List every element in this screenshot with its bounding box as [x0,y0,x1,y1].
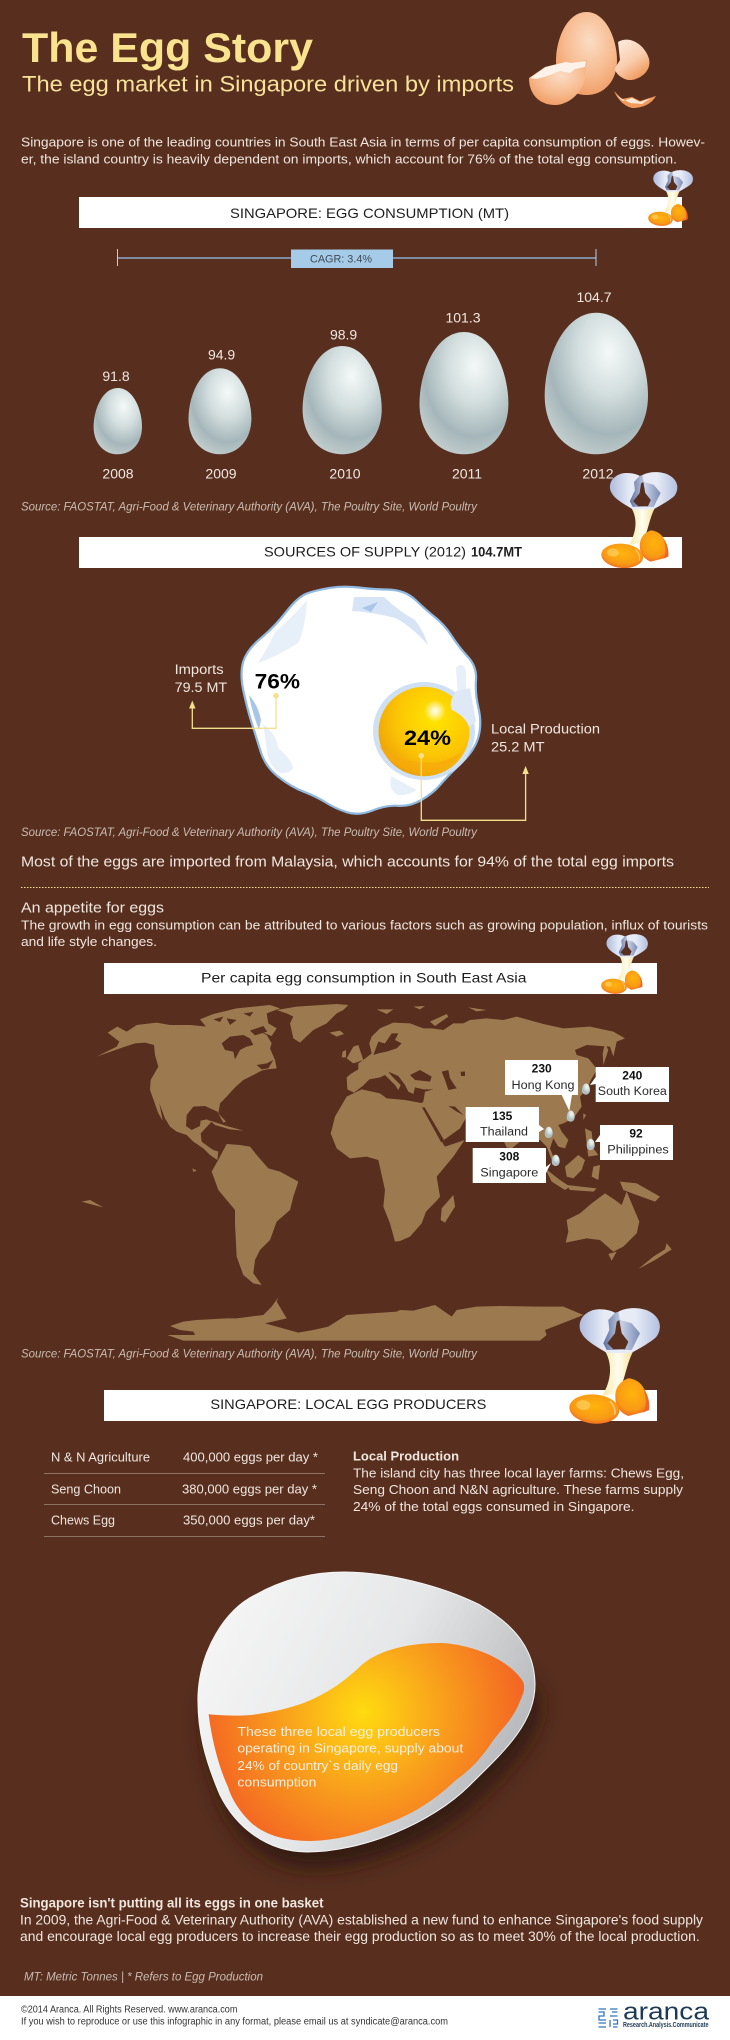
egg 2011: 101.3 [445,310,481,326]
map callout: Singapore [473,1148,560,1183]
New Guinea [620,1182,660,1202]
intro text: er, the island country is heavily dependent on imports, which account for 76% of the total egg consumption. [21,152,677,166]
text block: eggs in one basket [20,1896,703,1944]
table: local egg producers [44,1451,325,1536]
source note 1: Source: FAOSTAT, Agri-Food & Veterinary Authority (AVA), The Poultry Site, World Poultry [21,502,478,514]
chart: egg consumption by year [94,289,648,481]
Iceland [329,1031,344,1037]
egg 2009: 2009 [205,465,237,481]
egg 2008: 2008 [102,465,134,481]
Svalbard and Novaya Zemlya [377,1006,487,1026]
text block: local production: Seng Choon and N&N agriculture. These farms supply [353,1482,684,1497]
heading bar: egg consumption: SINGAPORE: EGG CONSUMPTION (MT) [230,205,509,221]
fried egg chart [242,587,480,814]
egg 2010: 2010 [329,465,361,481]
egg 2008 [94,368,142,481]
label: 76%: 76% [255,671,300,694]
Gulf of Aden [443,1137,467,1147]
map callout: Philippines [587,1125,673,1160]
text block: local production [353,1449,684,1514]
row: Seng Choon: 380,000 eggs per day * [182,1482,317,1496]
egg 2012 [545,289,648,481]
Borneo and Celebes [565,1155,600,1180]
yolk [373,682,475,780]
callout text: operating in Singapore, supply about [237,1741,464,1756]
row: N & N Agriculture [51,1451,318,1465]
row: Chews Egg: 350,000 eggs per day* [183,1514,315,1528]
footnote: MT: Metric Tonnes | * Refers to Egg Production [24,1972,263,1984]
heading bar: per capita consumption [104,963,657,994]
heading bar: sources of supply [79,537,682,568]
row: N & N Agriculture: N & N Agriculture [51,1451,150,1465]
heading bar: sources of supply: SOURCES OF SUPPLY (2012) [264,544,466,560]
Arctic islands [200,1005,280,1036]
Australia [566,1192,639,1252]
New Zealand [638,1243,672,1269]
heading bar: per capita consumption: Per capita egg consumption in South East Asia [201,970,527,986]
copyright text: ©2014 Aranca. All Rights Reserved. www.aranca.com [21,2004,237,2015]
text block: an appetite for eggs: The growth in egg consumption can be attributed to various factors such as growing population, influx of tourists [21,918,708,932]
Eurasia [347,1017,625,1165]
icon: cracked egg small [648,170,693,227]
egg shadow [204,1617,541,1869]
egg 2010: 98.9 [330,326,357,342]
map callout: Philippines: 92 [629,1127,643,1141]
text block: local production: The island city has three local layer farms: Chews Egg, [353,1465,684,1480]
egg white shading [249,597,473,795]
Greenland [277,1004,348,1043]
Caspian and Aral [442,1070,465,1090]
heading bar: egg consumption [79,197,682,228]
Black Sea [410,1070,432,1082]
egg shell [198,1572,535,1852]
Cuba and Hispaniola [210,1121,243,1131]
label: local production: 25.2 MT [491,739,544,754]
egg 2009: 94.9 [208,346,235,362]
statement: Malaysia imports: Most of the eggs are imported from Malaysia, which accounts for 94% of the total egg imports [21,855,674,871]
copyright text: If you wish to reproduce or use this infographic in any format, please email us at syndicate@aranca.com [21,2016,448,2027]
egg 2011 [420,310,508,481]
row: N & N Agriculture: 400,000 eggs per day * [183,1451,318,1465]
heading bar: local egg producers: SINGAPORE: LOCAL EGG PRODUCERS [210,1396,486,1412]
intro text: Singapore is one of the leading countries in South East Asia in terms of per capita consumption of eggs. Howev- [21,136,705,150]
row: Seng Choon: Seng Choon [51,1482,121,1496]
Antarctica [167,1297,583,1341]
text block: local production: Local Production [353,1449,459,1464]
callout text: 24% of country`s daily egg [237,1758,398,1773]
egg 2012: 104.7 [576,289,612,305]
map: Eurasia, Africa, Oceania [331,1006,672,1269]
egg 2009 [188,346,251,481]
map callout: Thailand: 135 [492,1109,513,1123]
CAGR bracket: CAGR: 3.4% [310,254,372,266]
Arctic channels [213,1012,267,1035]
CAGR bracket [117,249,596,268]
Sakhalin [603,1043,608,1065]
Gulf of St Lawrence [257,1060,273,1069]
Tasmania [608,1252,617,1261]
arrow: local production [418,753,529,820]
label: local production: Local Production [491,721,600,736]
map callout: Hong Kong: 230 [532,1062,552,1076]
icon: brown eggs and shells [529,12,656,108]
subtitle: The egg market in Singapore driven by imports [22,72,514,96]
Sumatra and Java [545,1168,597,1192]
row: Seng Choon [51,1482,317,1496]
label: imports: 79.5 MT [175,680,227,695]
heading bar: local egg producers [104,1390,657,1421]
callout text: These three local egg producers [237,1724,441,1739]
egg 2010 [303,326,382,481]
label: imports [175,662,227,695]
egg white [242,587,480,814]
label: 24%: 24% [404,727,451,750]
map callout: Thailand: Thailand [480,1126,528,1138]
map callout: Philippines: Philippines [607,1144,669,1156]
text block: an appetite for eggs: An appetite for eggs [21,901,164,917]
map callout: South Korea: South Korea [598,1086,667,1098]
map callout: South Korea: 240 [622,1068,643,1082]
logo: aranca [598,1998,710,2029]
title: The Egg Story [22,24,314,71]
big egg callout [198,1572,541,1869]
egg 2011: 2011 [452,465,482,481]
text block: eggs in one basket: and encourage local egg producers to increase their egg production so as to meet 30% of the local production. [20,1929,700,1944]
egg 2008: 91.8 [102,368,130,384]
logo: aranca: aranca [623,1998,710,2025]
South America [212,1144,298,1285]
label: imports: Imports [175,662,224,677]
map: Americas, Greenland, Antarctica [82,1004,583,1341]
source note 2: Source: FAOSTAT, Agri-Food & Veterinary Authority (AVA), The Poultry Site, World Poultry [21,827,478,839]
North America [97,1023,277,1160]
intro text [21,136,705,166]
world map [82,1004,672,1341]
copyright text [21,2004,448,2027]
Madagascar [441,1195,455,1223]
map callout: Singapore: Singapore [480,1168,538,1180]
footer [0,1996,730,2040]
Red Sea [422,1107,444,1143]
text block: eggs in one basket: In 2009, the Agri-Food & Veterinary Authority (AVA) established a new fund to enhance Singapore's food supply [20,1912,703,1927]
map callout: Hong Kong [505,1060,578,1122]
Hudson Bay [222,1035,253,1059]
Pacific specks [82,1168,197,1207]
icon: cracked egg medium [600,472,677,570]
row: Chews Egg: Chews Egg [51,1514,115,1528]
source note 3: Source: FAOSTAT, Agri-Food & Veterinary Authority (AVA), The Poultry Site, World Poultry [21,1348,478,1360]
orange yolk panel [209,1643,524,1841]
callout text: consumption [237,1775,316,1790]
Baltic Sea [373,1033,402,1055]
Africa [331,1089,465,1242]
heading bar: sources of supply: 104.7MT [471,544,522,560]
Britain and Ireland [342,1045,363,1063]
label: local production [491,721,600,754]
callout text [237,1724,464,1790]
map callout: Hong Kong: Hong Kong [512,1080,574,1092]
map callout: Thailand [466,1107,553,1142]
text block: local production: 24% of the total eggs consumed in Singapore. [353,1499,634,1514]
Persian Gulf [448,1106,463,1115]
map callout: South Korea [582,1067,669,1102]
text block: an appetite for eggs [21,901,708,949]
icon: cracked egg large [568,1308,660,1426]
text block: an appetite for eggs: and life style changes. [21,935,157,949]
Philippines [585,1128,598,1157]
icon: cracked egg on bar 3 [601,934,648,995]
egg 2012: 2012 [582,465,614,481]
text block: eggs in one basket: Singapore isn't putting all its eggs in one basket [20,1896,324,1911]
Taiwan [583,1113,586,1120]
map callout: Singapore: 308 [499,1150,520,1164]
arrow: imports [189,693,279,728]
row: Chews Egg [51,1514,315,1528]
